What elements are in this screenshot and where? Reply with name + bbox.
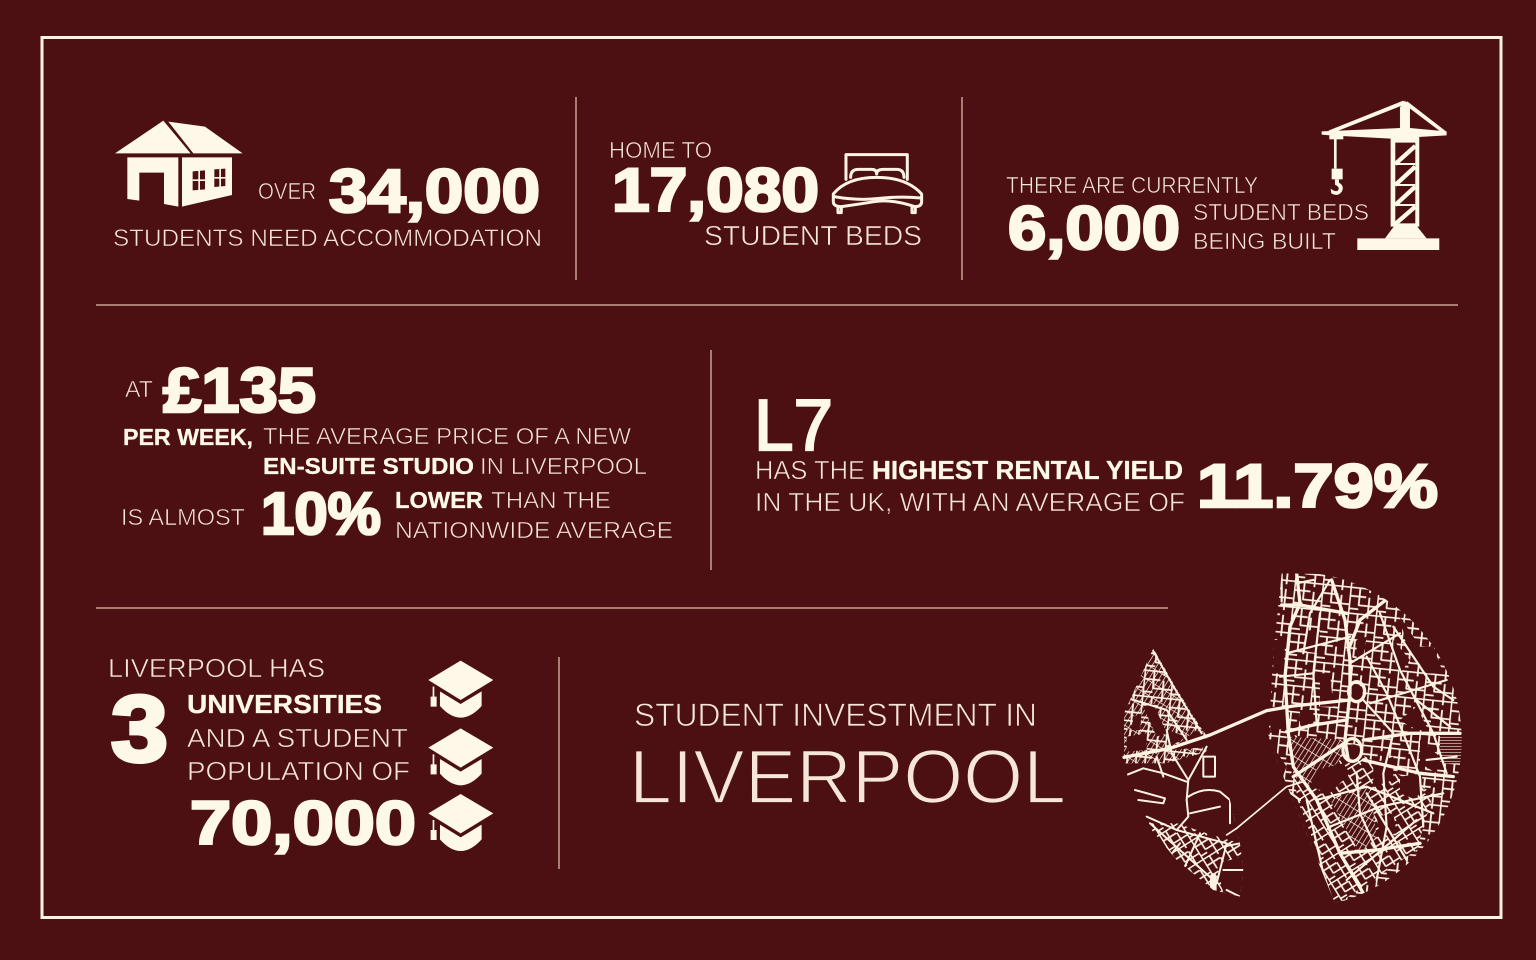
text: highest rental yield: HAS THE: [755, 455, 865, 485]
text: student beds being built: BEING BUILT: [1193, 228, 1336, 254]
text: students need accommodation: STUDENTS NEED ACCOMMODATION: [113, 225, 542, 252]
text: lower than average: [395, 487, 673, 543]
text: lower than average: THAN THE: [491, 487, 611, 513]
text: average price description: EN-SUITE STUDIO: [263, 453, 474, 479]
map: river tunnel connectors: [1124, 700, 1350, 835]
number: 3: 3: [111, 676, 168, 781]
map: Liverpool street network: [1120, 567, 1467, 907]
text: home to: HOME TO: [609, 137, 712, 163]
number: 17,080: 17,080: [612, 156, 819, 224]
panel: student beds: [609, 137, 922, 251]
text: is almost: IS ALMOST: [121, 504, 245, 530]
number: 70,000: 70,000: [190, 789, 416, 857]
panel: universities: [108, 653, 493, 857]
icon: graduation caps: [428, 661, 493, 851]
number: 34,000: 34,000: [329, 157, 540, 225]
map: west bank: [1120, 643, 1247, 900]
text: student beds: STUDENT BEDS: [704, 220, 922, 251]
number: 10%: 10%: [261, 481, 381, 547]
text: highest rental yield: HIGHEST RENTAL YIELD: [872, 455, 1183, 485]
title line: Liverpool: LIVERPOOL: [629, 735, 1066, 820]
text: at: AT: [125, 376, 153, 402]
heading: L7: L7: [754, 386, 833, 466]
panel: weekly price: [121, 356, 673, 547]
text: per week: PER WEEK,: [123, 424, 253, 450]
panel: beds being built: [1006, 101, 1447, 262]
text: lower than average: NATIONWIDE AVERAGE: [395, 517, 673, 543]
number: 11.79%: 11.79%: [1197, 452, 1438, 520]
text: lower than average: LOWER: [395, 487, 483, 513]
title line: student investment in: STUDENT INVESTMENT IN: [634, 697, 1037, 733]
icon: crane: [1322, 101, 1447, 250]
text: highest rental yield: [755, 455, 1185, 517]
panel: L7 rental yield: [754, 386, 1438, 520]
text: average price description: IN LIVERPOOL: [480, 453, 647, 479]
number: 6,000: 6,000: [1008, 194, 1180, 262]
text: and a student population of: [187, 723, 410, 786]
map: east bank: [1267, 567, 1467, 907]
panel: students needing accommodation: [113, 121, 542, 252]
title: [629, 697, 1066, 820]
icon: bed: [833, 155, 922, 213]
text: and a student population of: AND A STUDENT: [187, 723, 408, 753]
text: average price description: THE AVERAGE PRICE OF A NEW: [263, 423, 631, 449]
text: universities: UNIVERSITIES: [187, 689, 382, 719]
text: over: OVER: [258, 178, 316, 204]
text: there are currently: THERE ARE CURRENTLY: [1006, 172, 1258, 198]
text: and a student population of: POPULATION OF: [187, 756, 410, 786]
icon: house: [115, 121, 243, 207]
text: highest rental yield: IN THE UK, WITH AN AVERAGE OF: [755, 487, 1185, 517]
text: average price description: [263, 423, 647, 479]
text: student beds being built: [1193, 199, 1369, 254]
text: liverpool has: LIVERPOOL HAS: [108, 653, 325, 683]
number: £135: £135: [163, 356, 316, 426]
text: student beds being built: STUDENT BEDS: [1193, 199, 1369, 225]
